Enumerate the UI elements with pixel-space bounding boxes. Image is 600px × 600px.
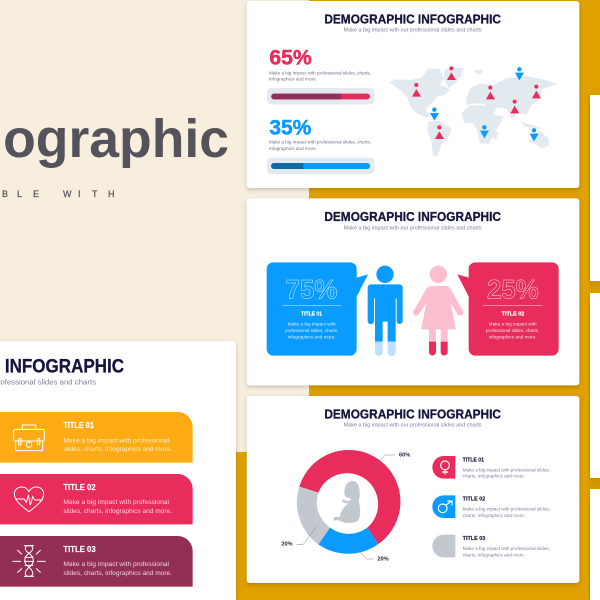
callout: 75%: infographics and more. [288,334,336,339]
callout: 75% [267,262,368,356]
data labels: 60% [399,453,410,459]
slide subtitle: Make a big impact with our professional slides and charts [344,423,482,429]
panel: world map slide [247,1,579,188]
callout: 75%: Make a big impact with [288,322,336,327]
legend: title 03: TITLE 03 [463,536,485,542]
text: 65% description [269,71,371,82]
bar: title 01: slides, charts, infographics and more. [63,446,172,453]
leader lines [297,455,395,559]
text: title 03: TITLE 03 [63,545,96,554]
bar: title 03 [0,536,193,587]
data labels: 20% [377,557,389,563]
text: 65% description: Make a big impact with professional slides, charts, [269,70,371,76]
icon: male figure [368,266,403,356]
callout: 75%: 75% [286,274,337,304]
donut chart [297,450,400,554]
legend: title 01: TITLE 01 [463,457,484,463]
legend: title 03: charts, infographics and more. [463,552,525,557]
text: 65% description: infographics and more. [269,77,317,83]
slide title: DEMOGRAPHIC INFOGRAPHIC [324,406,501,421]
bar: title 01 [0,412,193,463]
slide title: DEMOGRAPHIC INFOGRAPHIC [324,209,501,224]
callout: 75%: professional slides, charts, [285,328,338,333]
legend: title 01 [432,456,550,479]
icon: heart with pulse [14,487,44,512]
progress bar: 35% [267,158,374,174]
text: title 02: TITLE 02 [63,483,96,492]
data labels: 20% [281,542,293,548]
bar: title 03: slides, charts, infographics and more. [63,570,172,577]
background: cream panel [0,0,309,452]
legend: title 02: TITLE 02 [463,497,485,503]
bar: title 02 [0,474,193,524]
stat: 65%: 65% [269,45,312,69]
slide title: DEMOGRAPHIC INFOGRAPHIC [324,11,501,26]
text: 35% description: Make a big impact with professional slides, charts, [269,140,371,146]
legend: title 01: charts, infographics and more. [463,474,525,479]
map markers: female [412,66,541,139]
icon: fetus [333,481,360,523]
progress bar: 65% [267,88,374,104]
legend: title 01: Make a big impact with professional slides, [463,467,550,472]
legend: title 03: Make a big impact with professional slides, [463,546,550,551]
callout: 25%: 25% [487,274,539,304]
callout: 25% [457,262,559,356]
icon: female figure [413,266,463,355]
callout: 25%: TITLE 02 [502,312,524,318]
callout: 25%: infographics and more. [489,334,537,339]
bar: title 01: Make a big impact with professional [63,437,169,444]
callout: 25%: professional slides, charts, [486,328,539,333]
data labels [281,453,410,563]
stat: 35%: 35% [269,115,311,139]
callout: 25%: Make a big impact with [489,322,537,327]
icon: medical briefcase [14,425,44,451]
panel: donut chart slide [247,396,579,583]
icon: dna helix [12,546,46,576]
slide subtitle: Make a big impact with our professional slides and charts [344,28,482,34]
panel: left slide with titled bars [0,341,236,600]
text: title 01: TITLE 01 [63,421,95,430]
panel: gender comparison slide [247,198,579,385]
text: 35% description: infographics and more. [269,146,317,152]
right edge cards [590,95,600,600]
legend: title 02: charts, infographics and more. [463,513,525,518]
callout: 75%: TITLE 01 [301,312,322,318]
legend: title 03 [432,535,550,557]
map markers: male [430,67,539,141]
bar: title 02: Make a big impact with professional [63,499,169,506]
legend: title 02: Make a big impact with professional slides, [463,507,550,512]
world map [389,68,558,157]
text: 35% description [269,140,371,151]
legend: title 02 [432,495,550,518]
bar: title 03: Make a big impact with professional [63,561,169,568]
bar: title 02: slides, charts, infographics and more. [63,508,172,515]
slide subtitle: Make a big impact with our professional slides and charts [344,225,482,231]
